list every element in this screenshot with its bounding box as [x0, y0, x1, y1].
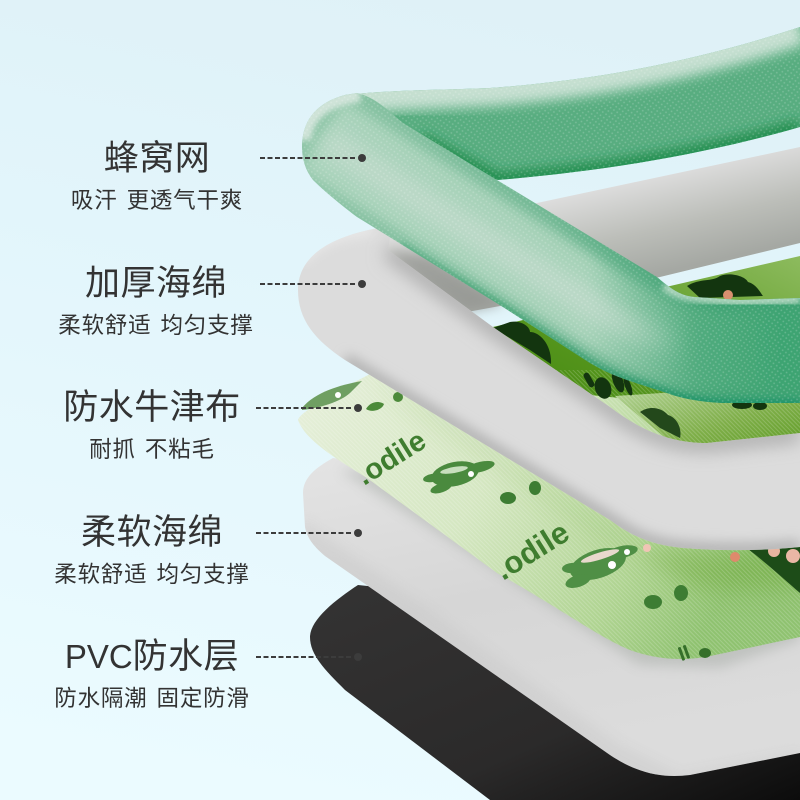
label: thick foam — [58, 264, 254, 338]
print: word dile first: .odile — [351, 425, 432, 492]
layer: black PVC base — [310, 585, 800, 800]
leader: soft foam — [256, 529, 362, 537]
sheet front section — [298, 373, 800, 659]
print: flower pink dot — [723, 290, 733, 300]
sheet inner section — [615, 384, 800, 450]
label: thick foam: 柔软舒适 均匀支撑 — [58, 313, 254, 338]
label: honeycomb mesh — [71, 139, 243, 213]
layer: honeycomb mesh ring back bar — [346, 27, 800, 180]
label: honeycomb mesh: 蜂窝网 — [104, 139, 210, 178]
label: soft foam — [54, 513, 250, 587]
leader: oxford fabric — [256, 404, 362, 412]
leader: honeycomb mesh — [260, 154, 366, 162]
label: honeycomb mesh: 吸汗 更透气干爽 — [71, 188, 243, 213]
print: dark flowers on back section — [493, 274, 767, 438]
label: oxford fabric — [63, 388, 241, 462]
label: PVC layer: PVC防水层 — [65, 637, 239, 676]
layer: honeycomb mesh ring front bar — [295, 85, 800, 410]
leader: PVC layer — [256, 653, 362, 661]
label: thick foam: 加厚海绵 — [85, 264, 227, 303]
layer: lower soft foam — [300, 458, 800, 790]
label: PVC layer: 防水隔潮 固定防滑 — [54, 686, 250, 711]
label: PVC layer — [54, 637, 250, 711]
print: tree and pink flowers — [643, 544, 800, 593]
leader: thick foam — [260, 280, 366, 288]
print: crocodile second — [562, 542, 639, 591]
layer: thick foam ring back bar — [373, 147, 800, 312]
label: oxford fabric: 防水牛津布 — [63, 388, 241, 427]
print: leaves — [366, 392, 688, 609]
print: crocodile first — [422, 457, 496, 496]
label: soft foam: 柔软舒适 均匀支撑 — [54, 562, 250, 587]
label: soft foam: 柔软海绵 — [81, 513, 223, 552]
layer: waterproof oxford print sheet — [290, 256, 800, 670]
label: oxford fabric: 耐抓 不粘毛 — [89, 437, 215, 462]
print: small crocodile top — [302, 381, 362, 410]
print: word dile second: .odile — [488, 514, 575, 587]
layer: thick foam ring front bar — [290, 220, 800, 560]
sheet back section seen through the ring — [480, 256, 800, 420]
print: letters at bottom edge — [678, 645, 711, 661]
